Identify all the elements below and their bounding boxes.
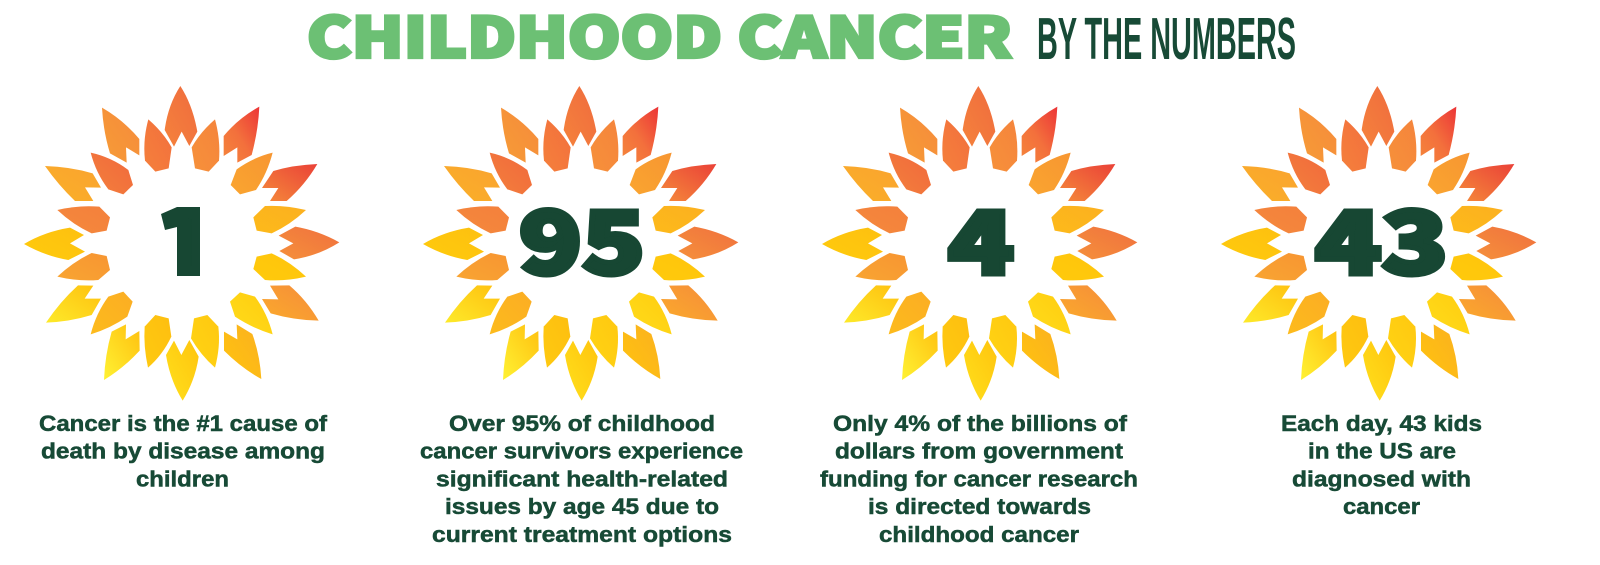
caption 43: diagnosed with	[1292, 466, 1471, 492]
big number 1: 1	[156, 174, 222, 300]
caption 43: in the US are	[1308, 438, 1456, 464]
icon: sunburst 4	[822, 86, 1137, 401]
caption 1: death by disease among	[41, 438, 325, 464]
caption 4: dollars from government	[835, 438, 1124, 464]
caption 1: Cancer is the #1 cause of	[39, 411, 328, 436]
big number 95: 95	[519, 174, 645, 300]
caption 4	[820, 411, 1138, 547]
big number 4: 4	[948, 174, 1014, 300]
panel: number 4	[820, 86, 1138, 547]
caption 43: Each day, 43 kids	[1281, 411, 1482, 436]
panel: number 1	[24, 86, 339, 491]
caption 1	[39, 411, 328, 492]
icon: sunburst 1	[24, 86, 339, 401]
panel: number 95	[420, 86, 743, 547]
caption 4: childhood cancer	[879, 522, 1079, 547]
icon: sunburst 95	[423, 86, 738, 401]
caption 95: cancer survivors experience	[420, 438, 743, 464]
caption 1: children	[136, 466, 229, 492]
caption 43	[1281, 411, 1482, 519]
caption 95: issues by age 45 due to	[445, 494, 719, 519]
caption 95: significant health-related	[436, 466, 728, 492]
caption 43: cancer	[1343, 494, 1420, 519]
caption 95: Over 95% of childhood	[449, 411, 715, 436]
title	[307, 0, 1296, 74]
caption 95	[420, 411, 743, 547]
panel: number 43	[1221, 86, 1536, 519]
text: BY THE NUMBERS	[1037, 6, 1296, 72]
caption 95: current treatment options	[432, 522, 732, 547]
big number 43: 43	[1315, 174, 1448, 300]
caption 4: funding for cancer research	[820, 466, 1138, 492]
icon: sunburst 43	[1221, 86, 1536, 401]
caption 4: Only 4% of the billions of	[833, 411, 1128, 436]
caption 4: is directed towards	[868, 494, 1091, 519]
